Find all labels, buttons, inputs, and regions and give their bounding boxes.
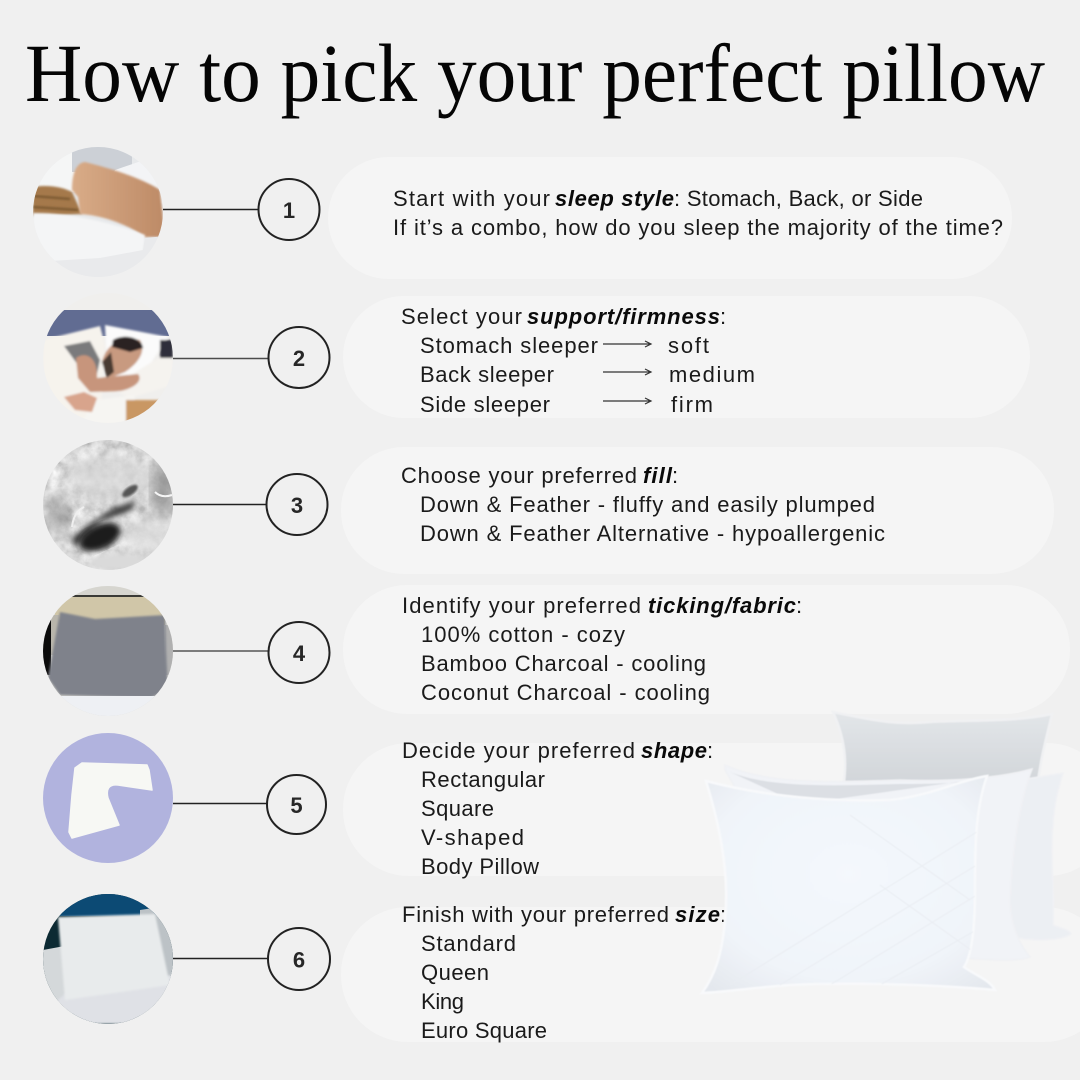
text: step 2: : [720, 304, 726, 329]
photo: square white pillow [43, 894, 173, 1024]
number badge 2 [268, 327, 330, 388]
text: step 5: Body Pillow [421, 854, 539, 879]
text: step 2: Side sleeper [420, 392, 550, 417]
panel: step 2 support [343, 296, 1030, 418]
text: step 3 [401, 463, 885, 546]
text: step 5: Rectangular [421, 767, 545, 792]
connector 1 [163, 208, 258, 210]
text: step 3: fill [643, 463, 673, 488]
text: step 1: sleep style [555, 186, 674, 211]
text: step 6: size [675, 902, 720, 927]
number badge 3: 3 [291, 493, 303, 518]
panel: step 5 shape [343, 738, 1080, 879]
connector 6 [173, 958, 268, 960]
text: step 5: V-shaped [421, 825, 524, 850]
text: step 4: Bamboo Charcoal - cooling [421, 651, 706, 676]
photo: grey charcoal pillow [43, 586, 173, 698]
text: step 6: King [421, 989, 464, 1014]
panel: step 6 size [341, 902, 1080, 1043]
text: step 5: Decide your preferred [402, 738, 635, 763]
number badge 5 [267, 775, 326, 834]
photo: man sleeping on side [47, 310, 173, 421]
text: step 2: firm [671, 392, 713, 417]
text: step 2: support/firmness [527, 304, 720, 329]
number badge 6 [268, 928, 330, 990]
text: step 2: Select your [401, 304, 522, 329]
text: step 3: Choose your preferred [401, 463, 637, 488]
text: step 3: : [672, 463, 678, 488]
text: step 4: Coconut Charcoal - cooling [421, 680, 710, 705]
text: step 1 [393, 186, 1003, 240]
number badge 3 [266, 474, 328, 535]
text: step 5: Square [421, 796, 494, 821]
text: step 3: Down & Feather Alternative - hypoallergenic [420, 521, 885, 546]
number badge 1: 1 [283, 198, 295, 223]
text: step 2 [401, 304, 755, 417]
text: step 2: soft [668, 333, 709, 358]
text: step 2: Stomach sleeper [420, 333, 598, 358]
text: step 6: Euro Square [421, 1018, 547, 1043]
text: step 1: If it’s a combo, how do you sleep the majority of the time? [393, 215, 1003, 240]
text: step 4: 100% cotton - cozy [421, 622, 625, 647]
number badge 2: 2 [293, 346, 305, 371]
title: How to pick your perfect pillow [25, 27, 1045, 119]
text: step 5 [402, 738, 713, 879]
panel: step 1 sleep style [328, 157, 1012, 279]
text: step 6: Queen [421, 960, 489, 985]
text: step 3: Down & Feather - fluffy and easily plumped [420, 492, 875, 517]
third pillow right side [1003, 773, 1071, 940]
number badge 5: 5 [290, 793, 303, 818]
image: stack of white pillows [702, 712, 1071, 993]
front pillow [702, 776, 995, 993]
connector 4 [173, 650, 268, 652]
middle pillow [725, 765, 1032, 960]
text: step 6: Standard [421, 931, 516, 956]
text: step 2: Back sleeper [420, 362, 554, 387]
connector 2 [173, 358, 268, 360]
text: step 1: : Stomach, Back, or Side [674, 186, 923, 211]
text: step 6: Finish with your preferred [402, 902, 669, 927]
connector 5 [173, 802, 267, 804]
panel: step 3 fill [341, 447, 1054, 574]
text: step 5: : [707, 738, 713, 763]
photo: down and feathers [43, 440, 178, 571]
back pillow [833, 712, 1052, 790]
number badge 6: 6 [293, 948, 305, 972]
text: step 6: : [720, 902, 726, 927]
text: step 4: Identify your preferred [402, 593, 641, 618]
photo: woman sleeping on stomach [33, 147, 163, 238]
text: step 4 [402, 593, 802, 705]
panel: step 4 fabric [343, 585, 1070, 714]
text: step 1: Start with your [393, 186, 550, 211]
text: step 5: shape [641, 738, 707, 763]
text: step 2: medium [669, 362, 755, 387]
connector 3 [173, 504, 267, 506]
photo: V-shaped pillow [43, 733, 173, 863]
text: step 4: : [796, 593, 802, 618]
arrows [603, 341, 651, 404]
number badge 1 [258, 179, 320, 240]
number badge 4 [268, 622, 330, 683]
text: step 4: ticking/fabric [648, 593, 796, 618]
number badge 4: 4 [293, 641, 306, 666]
text: step 6 [402, 902, 726, 1043]
